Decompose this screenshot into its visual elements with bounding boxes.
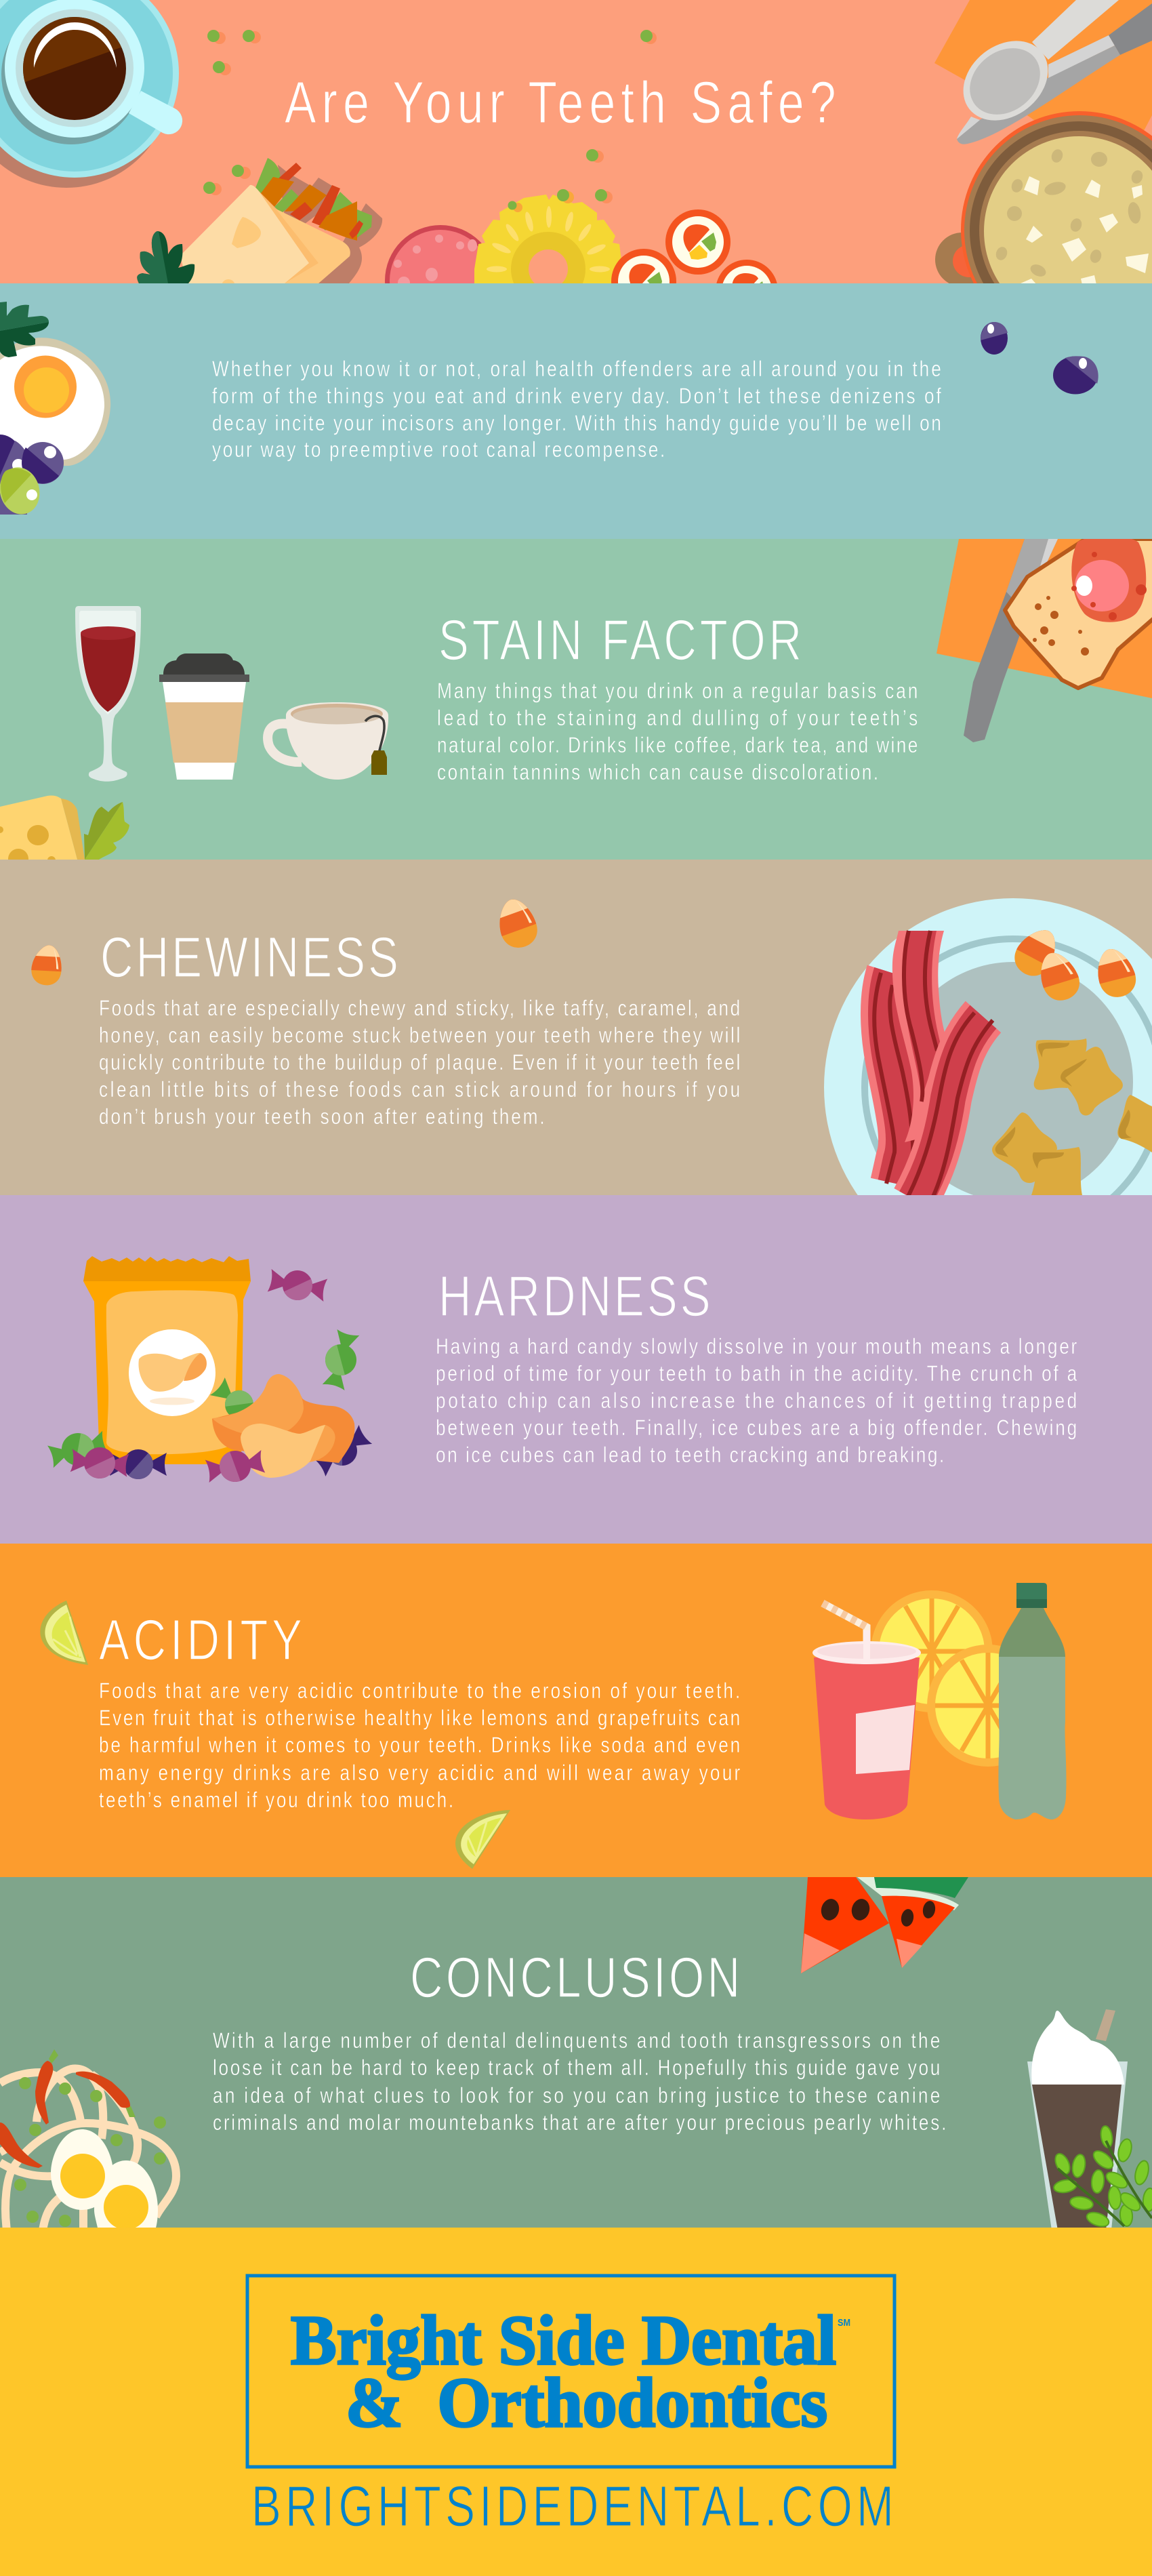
logo: Bright Side Dental: Bright Side Dental [291, 2301, 836, 2379]
icon: placemat with spoon and knife [934, 0, 1152, 144]
heading: conclusion: CONCLUSION [410, 1946, 740, 2010]
panel: chewiness [0, 860, 1152, 1276]
text block: stain factor [437, 680, 918, 785]
icon: noodles with eggs and chilies [0, 2049, 176, 2230]
logo: & Orthodontics: & Orthodontics [346, 2364, 827, 2442]
text block: acidity [99, 1680, 741, 1813]
icon: berries at left [0, 435, 64, 519]
icon: berries at right [981, 322, 1098, 395]
heading: hardness: HARDNESS [438, 1265, 711, 1329]
icon: fried egg [0, 338, 110, 466]
text block: chewiness: quickly contribute to the buildup of plaque. Even if it your teeth feel [99, 1051, 740, 1075]
icon: coffee cup on saucer [0, 0, 182, 188]
panel: conclusion [0, 1877, 1152, 2230]
icon: placemat with knife and toast [937, 536, 1152, 742]
text block: hardness: between your teeth. Finally, ice cubes are a big offender. Chewing [436, 1417, 1077, 1441]
text block: introduction: decay incite your incisors any longer. With this handy guide you’ll be well on [212, 412, 941, 436]
text block: hardness: potato chip can also increase the chances of it getting trapped [436, 1390, 1077, 1413]
text block: hardness: on ice cubes can lead to teeth cracking and breaking. [436, 1444, 944, 1468]
icon: candy corn, left [22, 935, 71, 991]
text block: hardness [436, 1335, 1077, 1468]
text block: conclusion: With a large number of dental delinquents and tooth transgressors on the [213, 2030, 940, 2053]
panel: stain factor [0, 536, 1152, 869]
heading: acidity: ACIDITY [99, 1609, 302, 1672]
icon: bag of chips [83, 1256, 251, 1464]
text block: chewiness: clean little bits of these foods can stick around for hours if you [99, 1079, 740, 1102]
icon: bacon strips [874, 931, 993, 1200]
heading: chewiness: CHEWINESS [100, 926, 398, 990]
text block: conclusion: an idea of what clues to look for so you can bring justice to these canine [213, 2085, 940, 2108]
icon: milkshake with herbs [1027, 2009, 1152, 2230]
text block: acidity: Foods that are very acidic contribute to the erosion of your teeth. [99, 1680, 740, 1704]
text block: acidity: be harmful when it comes to your teeth. Drinks like soda and even [99, 1734, 740, 1758]
icon: cheese and leaf [0, 796, 129, 869]
icon: candy corn, top [488, 890, 543, 954]
website url: BRIGHTSIDEDENTAL.COM [251, 2474, 894, 2538]
text block: conclusion: loose it can be hard to keep track of them all. Hopefully this guide gave you [213, 2057, 940, 2080]
text block: stain factor: lead to the staining and dulling of your teeth’s [437, 707, 918, 731]
icon: tea cup [268, 702, 388, 780]
text block: introduction: form of the things you eat and drink every day. Don’t let these denizens of [212, 385, 942, 409]
icon: pineapple ring [474, 189, 621, 283]
text block: chewiness: honey, can easily become stuck between your teeth where they will [99, 1024, 740, 1048]
text block: chewiness: Foods that are especially chewy and sticky, like taffy, caramel, and [99, 997, 740, 1021]
icon: leaf on egg [0, 302, 49, 357]
panel: introduction [0, 283, 1152, 539]
text block: hardness: Having a hard candy slowly dissolve in your mouth means a longer [436, 1335, 1077, 1359]
icon: candy corn on plate [1000, 912, 1141, 1008]
text block: acidity: teeth’s enamel if you drink too much. [99, 1789, 453, 1813]
text block: chewiness: don’t brush your teeth soon after eating them. [99, 1106, 545, 1129]
icon: candy, indigo right [307, 1417, 374, 1479]
text block: stain factor: contain tannins which can cause discoloration. [437, 761, 878, 785]
panel: hero [0, 0, 1152, 283]
text block: conclusion [213, 2030, 946, 2135]
icon: plate [824, 898, 1152, 1276]
text block: stain factor: Many things that you drink on a regular basis can [437, 680, 918, 704]
text block: introduction: Whether you know it or not, oral health offenders are all around you in the [212, 358, 941, 382]
icon: soup bowl [935, 111, 1152, 283]
icon: scattered peas [203, 30, 657, 203]
icon: lemon slices [871, 1590, 1049, 1767]
panel: hardness [0, 1195, 1152, 1544]
icon: pastries [992, 1039, 1152, 1195]
text block: acidity: Even fruit that is otherwise healthy like lemons and grapefruits can [99, 1707, 740, 1731]
icon: sushi rolls [611, 209, 777, 283]
icon: watermelon slices [801, 1877, 968, 1973]
heading: stain factor: STAIN FACTOR [438, 609, 802, 672]
text block: conclusion: criminals and molar mountebanks that are after your precious pearly whites. [213, 2112, 946, 2135]
icon: wine glass [75, 606, 141, 782]
text block: introduction [212, 358, 942, 462]
icon: salami slice [385, 225, 481, 283]
text block: introduction: your way to preemptive root canal recompense. [212, 439, 665, 462]
panel: footer [0, 2228, 1152, 2576]
icon: green leaf [137, 231, 194, 283]
icon: lime wedge, left [40, 1601, 88, 1665]
text block: acidity: many energy drinks are also very acidic and will wear away your [99, 1762, 741, 1786]
title: Are Your Teeth Safe? [285, 70, 836, 136]
icon: water bottle [998, 1583, 1066, 1819]
icon: takeaway coffee [159, 653, 249, 780]
panel: acidity [0, 1544, 1152, 1877]
logo box [247, 2276, 894, 2467]
icon: lime wedge, bottom [455, 1810, 510, 1869]
icon: soda cup with straw [812, 1603, 921, 1819]
icon: potato chips [212, 1374, 354, 1478]
text block: stain factor: natural color. Drinks like coffee, dark tea, and wine [437, 734, 918, 758]
icon: candy, green on chips [208, 1371, 263, 1425]
text block: hardness: period of time for your teeth to bath in the acidity. The crunch of a [436, 1363, 1077, 1386]
service mark: SM [838, 2317, 850, 2329]
text block: chewiness [99, 997, 740, 1129]
icon: candies [46, 1266, 363, 1489]
icon: sandwich [180, 158, 382, 293]
